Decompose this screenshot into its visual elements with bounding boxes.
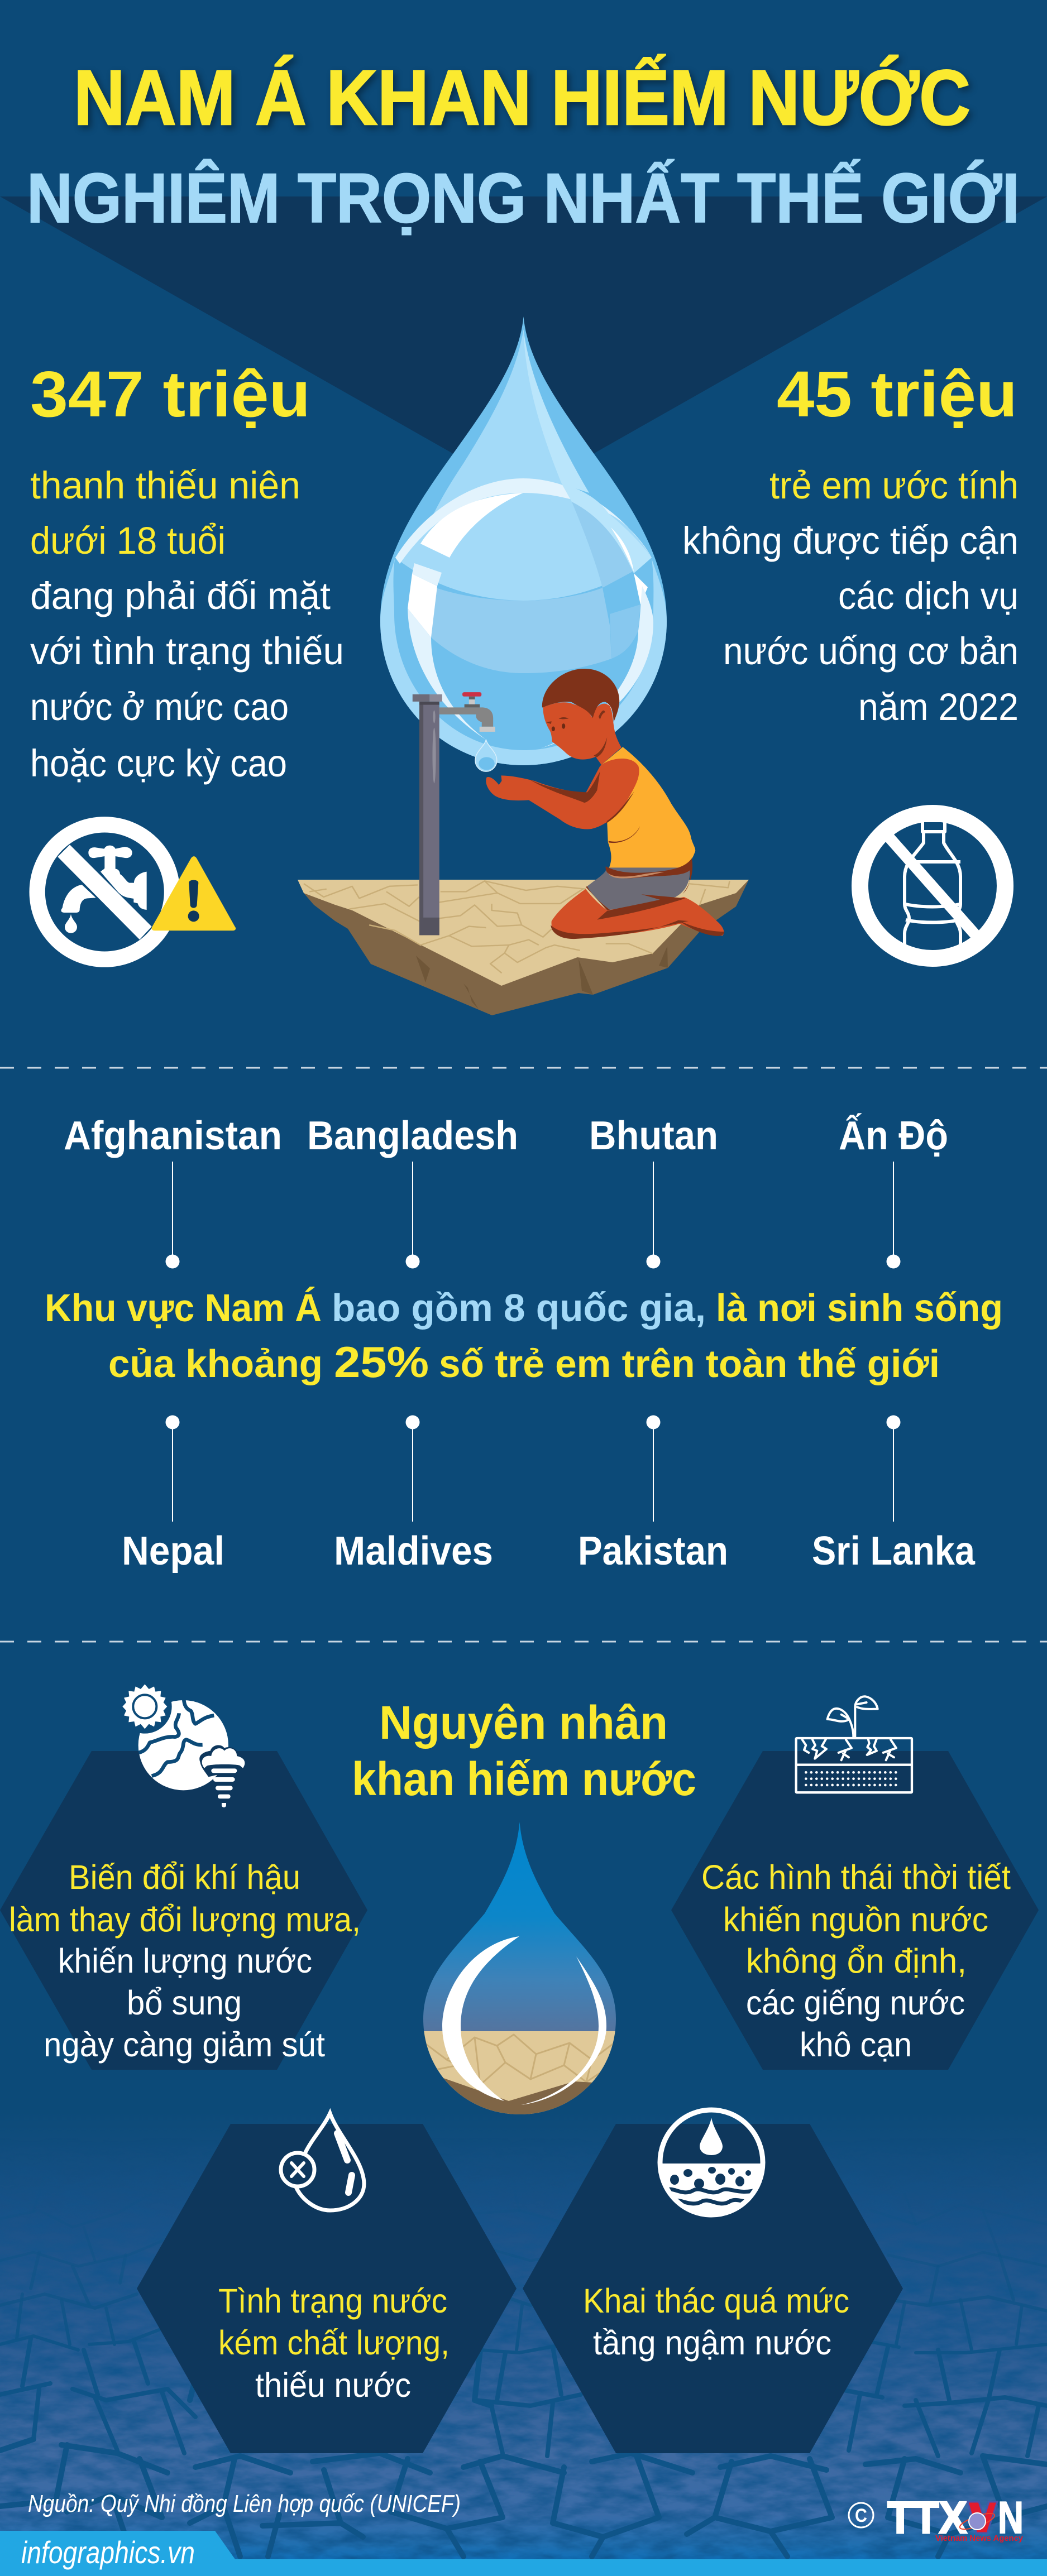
- South Asia statement: là nơi sinh sống: [716, 1286, 1003, 1330]
- TTXVN logo: Vietnam News Agency: [935, 2534, 1024, 2543]
- country: Nepal: Nepal: [122, 1529, 224, 1574]
- head: [543, 702, 621, 765]
- text: weather patterns: [701, 1858, 1011, 2064]
- text: poor water quality: kém chất lượng,: [218, 2324, 450, 2362]
- left description: [30, 464, 344, 785]
- country: Bangladesh: Bangladesh: [307, 1114, 518, 1158]
- country: Ấn Độ: [839, 1113, 948, 1268]
- text: weather patterns: không ổn định,: [746, 1942, 967, 1980]
- TTXVN logo: TTX: [887, 2493, 967, 2543]
- drop lower shading: [431, 586, 611, 673]
- country: Pakistan: Pakistan: [578, 1529, 728, 1574]
- icon: warning triangle: [152, 856, 236, 930]
- country: Sri Lanka: Sri Lanka: [812, 1529, 976, 1574]
- shorts: [587, 867, 690, 910]
- left description: với tình trạng thiếu: [30, 630, 344, 673]
- country: Bhutan: [589, 1114, 718, 1268]
- South Asia statement: số trẻ em trên toàn thế giới: [439, 1342, 940, 1385]
- country: Ấn Độ: Ấn Độ: [839, 1113, 948, 1158]
- small water drop with dry ground: [419, 1820, 620, 2121]
- text: climate change: làm thay đổi lượng mưa,: [9, 1901, 361, 1939]
- South Asia statement: 25%: [334, 1337, 429, 1387]
- source note: Nguồn: Quỹ Nhi đồng Liên hợp quốc (UNICEF): [28, 2490, 461, 2517]
- country: Afghanistan: Afghanistan: [64, 1114, 282, 1158]
- text: weather patterns: khô cạn: [800, 2026, 912, 2064]
- drop white highlights: [420, 493, 523, 558]
- left description: hoặc cực kỳ cao: [30, 742, 287, 785]
- text: poor water quality: [218, 2282, 450, 2404]
- right description: năm 2022: [858, 685, 1019, 728]
- icon: plant over dry soil: [796, 1696, 912, 1792]
- divider: [0, 1641, 1047, 1642]
- text: over-extraction: [583, 2282, 849, 2362]
- country: Afghanistan: [64, 1114, 282, 1268]
- South Asia statement: của khoảng: [108, 1342, 323, 1385]
- right description: các dịch vụ: [838, 574, 1019, 617]
- panel: poor water quality cause: [137, 2113, 517, 2453]
- icon: no bottled water: [860, 813, 1005, 958]
- title line 1: NAM Á KHAN HIẾM NƯỚC: [74, 54, 970, 141]
- South Asia statement: [45, 1286, 1003, 1387]
- panel: aquifer over-extraction cause: [523, 2110, 903, 2453]
- cracked ground island: [298, 880, 749, 1015]
- divider: [0, 1067, 1047, 1068]
- text: weather patterns: Các hình thái thời tiết: [701, 1858, 1011, 1896]
- shirt: [597, 747, 695, 872]
- TTXVN logo: C: [855, 2505, 867, 2526]
- TTXVN logo: N: [998, 2493, 1024, 2543]
- text: weather patterns: các giếng nước: [746, 1984, 965, 2022]
- text: climate change: khiến lượng nước: [58, 1942, 312, 1980]
- text: climate change: [9, 1858, 361, 2064]
- left description: đang phải đối mặt: [30, 574, 331, 617]
- arm: [486, 759, 639, 829]
- icon: polluted water drop: [281, 2113, 364, 2210]
- text: climate change: Biến đổi khí hậu: [69, 1858, 300, 1896]
- right description: nước uống cơ bản: [723, 630, 1019, 673]
- country: Bangladesh: [307, 1114, 518, 1268]
- left statistic block: [30, 358, 344, 785]
- panel: weather pattern cause: [671, 1696, 1039, 2070]
- text: climate change: ngày càng giảm sút: [44, 2026, 325, 2064]
- section heading: causes: Nguyên nhân: [379, 1696, 668, 1749]
- country: Maldives: Maldives: [334, 1529, 493, 1574]
- country: Nepal: [122, 1416, 224, 1574]
- water tap with column: [413, 692, 497, 935]
- text: poor water quality: thiếu nước: [255, 2366, 411, 2404]
- country: Sri Lanka: [812, 1416, 976, 1574]
- TTXVN logo: [849, 2493, 1024, 2543]
- text: over-extraction: Khai thác quá mức: [583, 2282, 849, 2320]
- South Asia statement: Khu vực Nam Á: [45, 1286, 322, 1330]
- text: over-extraction: tầng ngậm nước: [593, 2324, 831, 2362]
- icon: no tap water: [37, 824, 172, 960]
- country: Pakistan: [578, 1416, 728, 1574]
- text: weather patterns: khiến nguồn nước: [723, 1901, 988, 1939]
- website label: infographics.vn: [21, 2535, 195, 2570]
- faucet: [439, 707, 493, 727]
- panel: climate change cause: [0, 1680, 367, 2070]
- footer strip: [0, 2531, 1047, 2576]
- right statistic block: [682, 358, 1019, 728]
- South Asia statement: bao gồm 8 quốc gia,: [332, 1286, 706, 1330]
- text: climate change: bổ sung: [127, 1984, 242, 2022]
- title: [27, 54, 1020, 237]
- number: 347 triệu: 347 triệu: [30, 358, 310, 430]
- left description: nước ở mức cao: [30, 685, 289, 728]
- text: poor water quality: Tình trạng nước: [218, 2282, 447, 2320]
- left description: thanh thiếu niên: [30, 464, 300, 507]
- icon: globe, sun and tornado: [118, 1680, 245, 1807]
- child drinking: [486, 669, 724, 939]
- icon: aquifer: [659, 2110, 765, 2219]
- country: Maldives: [334, 1416, 493, 1574]
- country: Bhutan: Bhutan: [589, 1114, 718, 1158]
- top country labels with connectors: [64, 1113, 948, 1268]
- number: 45 triệu: 45 triệu: [777, 358, 1017, 430]
- big water drop: [380, 316, 667, 765]
- dark triangle behind title: [0, 196, 1047, 493]
- section heading: causes: khan hiếm nước: [352, 1753, 696, 1805]
- right description: [682, 464, 1019, 728]
- background: cracked earth texture: [0, 2159, 1047, 2559]
- drop lens: [395, 478, 652, 601]
- right description: không được tiếp cận: [682, 519, 1019, 562]
- bottom country labels with connectors: [122, 1416, 976, 1574]
- legs: [552, 889, 724, 938]
- left description: dưới 18 tuổi: [30, 519, 226, 562]
- falling drop: [475, 740, 497, 771]
- right description: trẻ em ước tính: [769, 464, 1019, 507]
- section heading: causes: [352, 1696, 696, 1805]
